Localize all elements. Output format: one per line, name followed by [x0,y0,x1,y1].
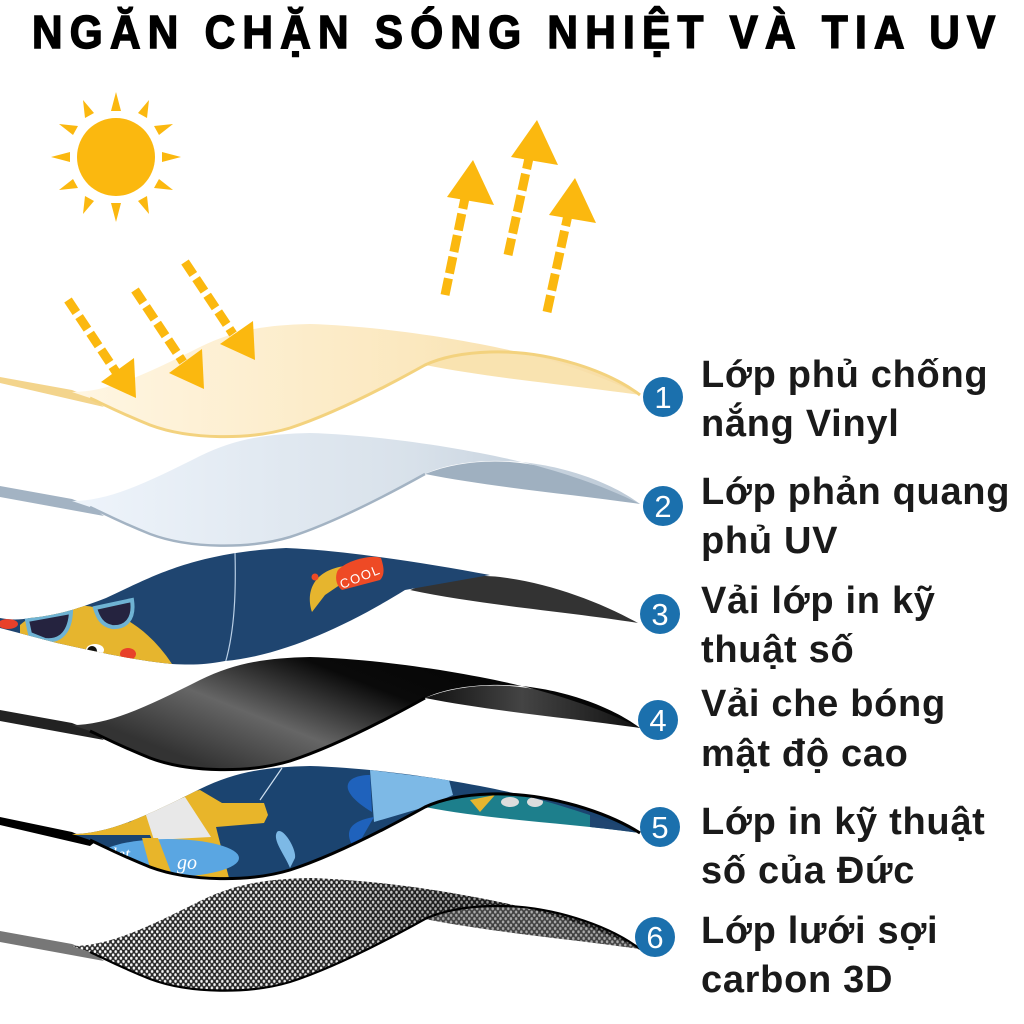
badge 4: 4 [649,703,667,738]
badge 1 [643,377,683,417]
label 1: Lớp phủ chống [701,354,988,396]
printed dog on surfboard: let [112,844,131,864]
badge 2: 2 [654,489,672,524]
label 4: mật độ cao [701,733,909,775]
icon: sun [51,92,181,222]
label 6: carbon 3D [701,959,893,1001]
label 6: Lớp lưới sợi [701,910,938,952]
badge 3 [640,594,680,634]
badge 3: 3 [651,597,669,632]
label 3: thuật số [701,629,854,671]
badge 1: 1 [654,380,672,415]
layer 2: UV reflective coating [0,433,640,546]
printed dog on surfboard [60,768,453,882]
layer 3: digitally printed fabric [0,548,638,664]
badge 5: 5 [651,810,669,845]
label 2: phủ UV [701,520,838,562]
printed dog on surfboard: go [177,852,197,874]
badge 6: 6 [646,920,664,955]
layer 5: German digital print [0,766,650,882]
layer 1: vinyl coating [0,324,640,437]
label 4: Vải che bóng [701,683,946,725]
label 5: Lớp in kỹ thuật [701,801,986,843]
label 1: nắng Vinyl [701,401,899,445]
printed sun with sunglasses [0,553,236,664]
layer 4: high-density blackout fabric [0,657,640,770]
title: NGĂN CHẶN SÓNG NHIỆT VÀ TIA UV [32,6,996,58]
label 2: Lớp phản quang [701,471,1010,513]
badge 4 [638,700,678,740]
printed cap with COOL text: COOL [338,562,383,592]
arrows: heat coming down [68,262,255,398]
layer 6: 3D carbon fibre mesh [0,878,640,991]
label 5: số của Đức [701,850,915,892]
printed cap with COOL text [310,557,384,612]
badge 5 [640,807,680,847]
badge 2 [643,486,683,526]
arrows: heat reflected up [445,120,596,312]
label 3: Vải lớp in kỹ [701,580,936,622]
badge 6 [635,917,675,957]
